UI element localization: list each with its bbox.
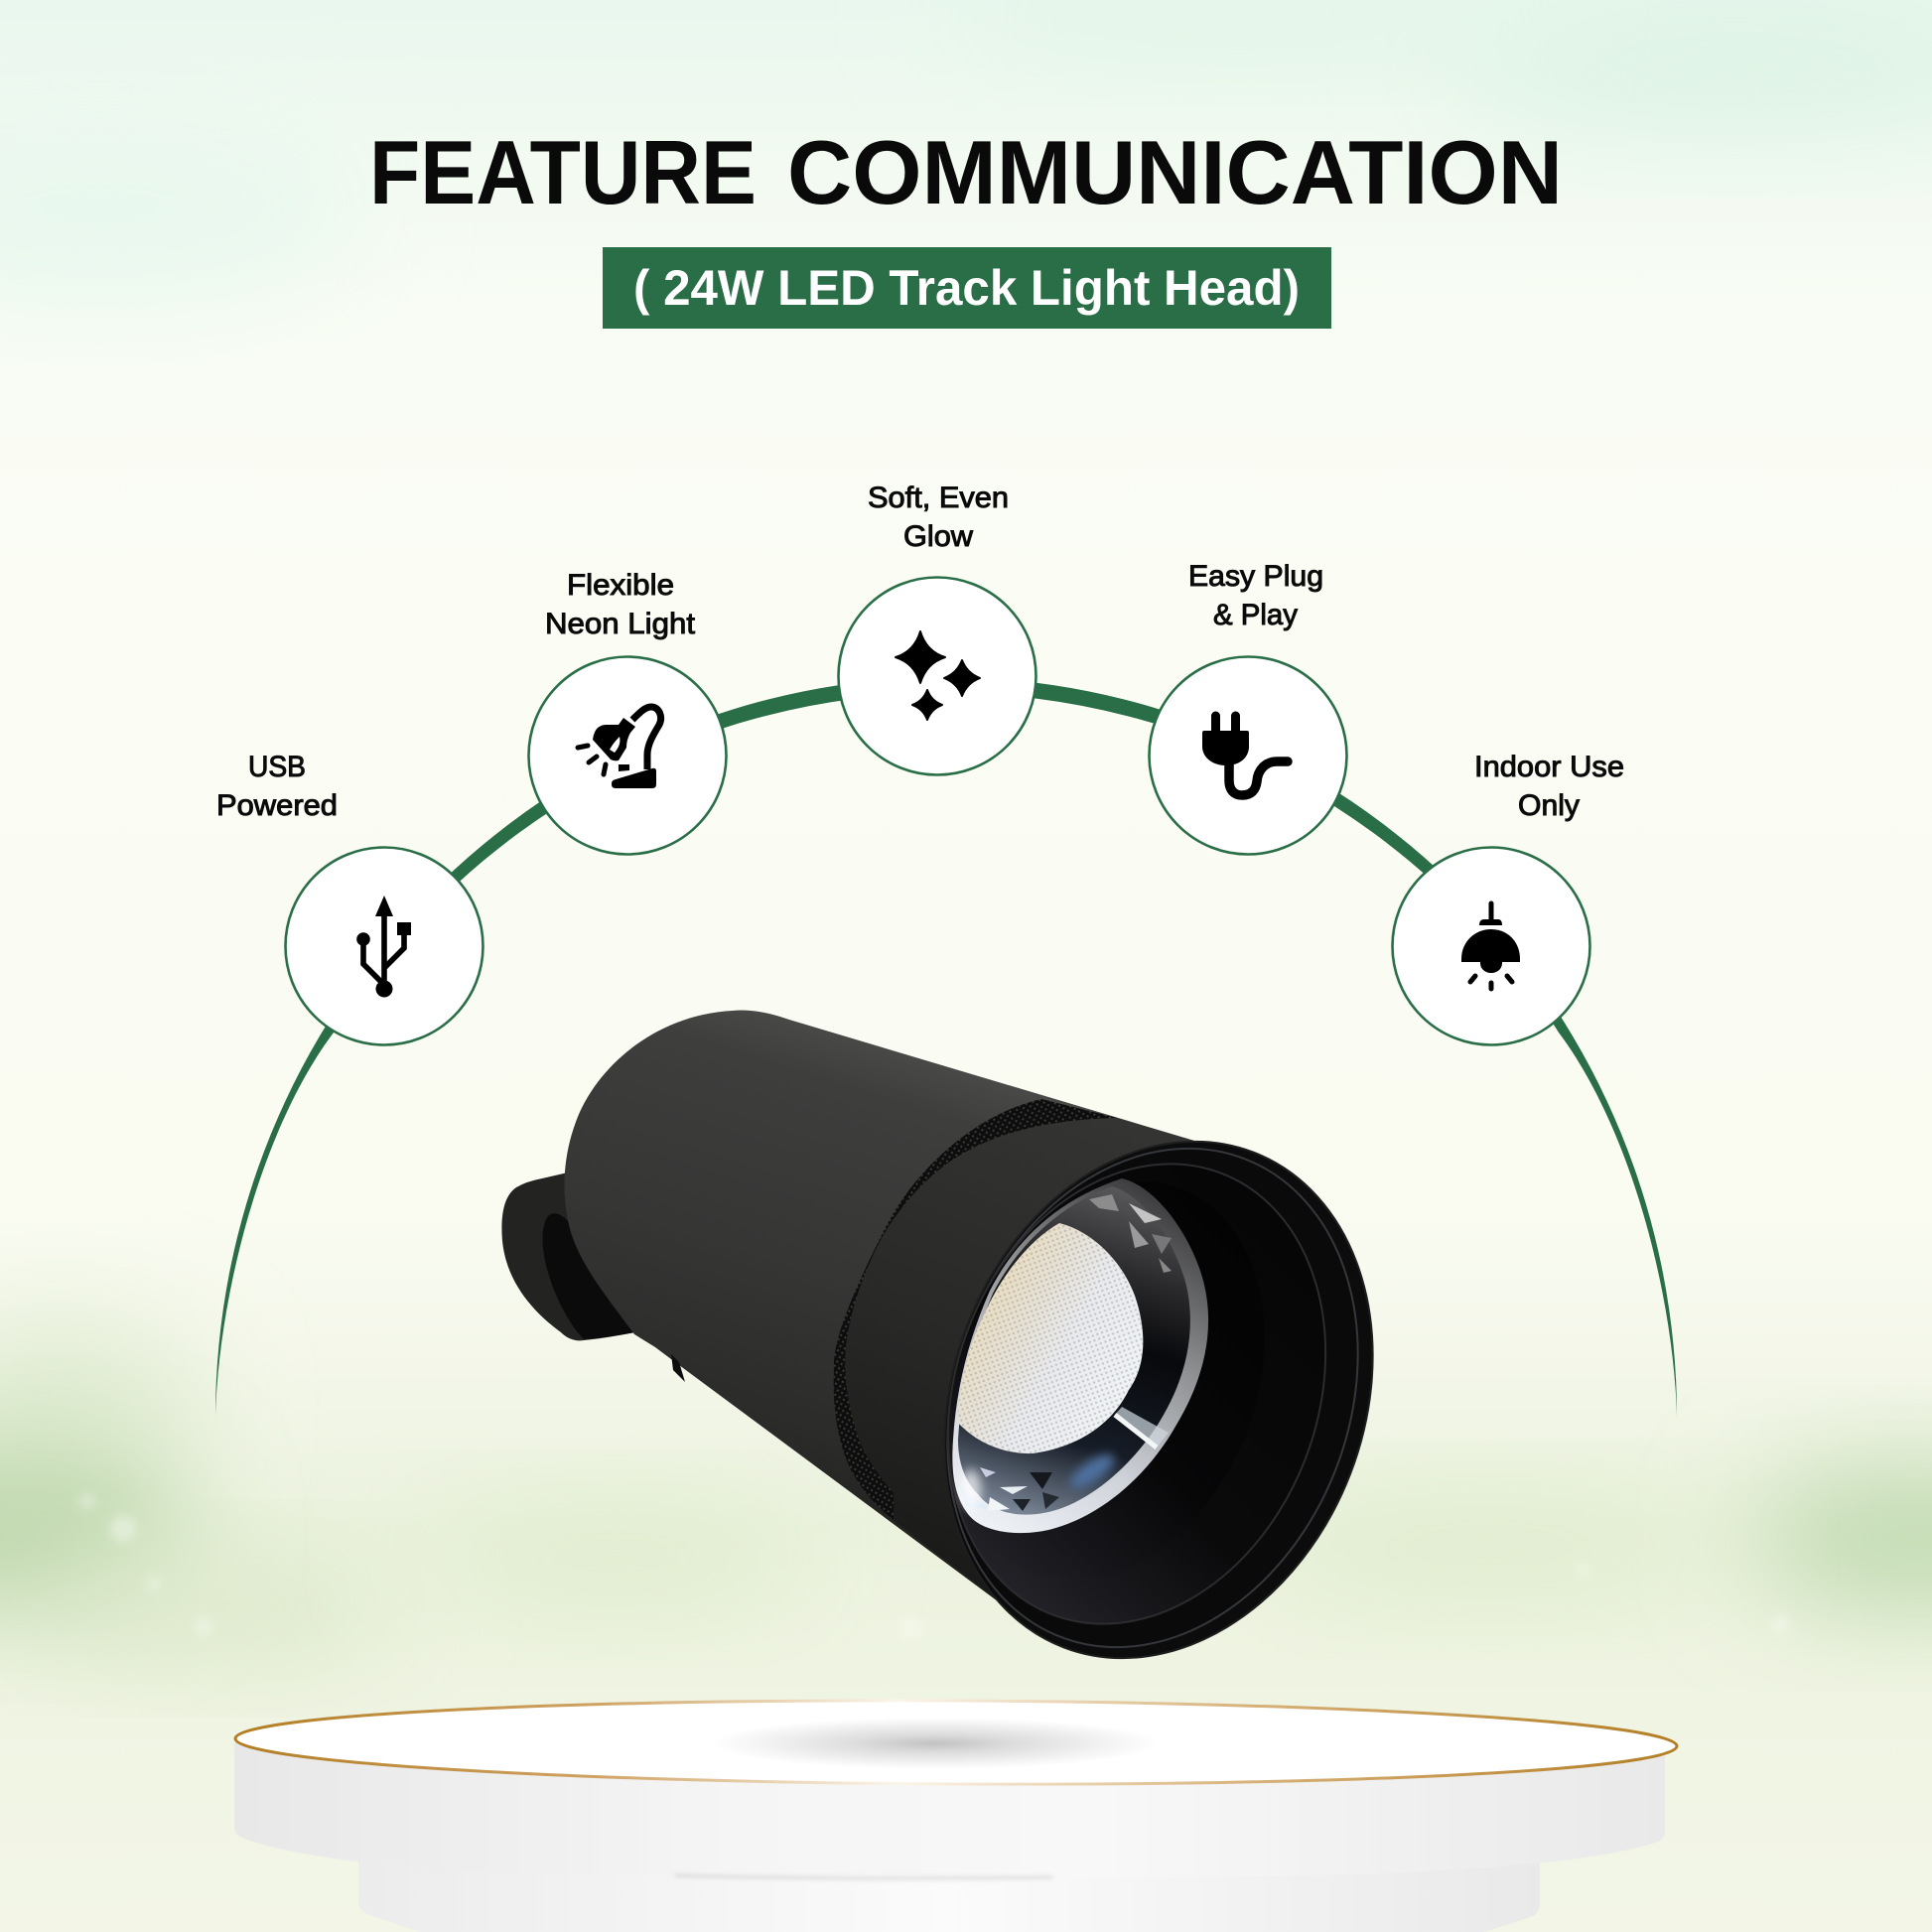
label: Indoor Use Only	[1474, 751, 1624, 822]
label: Soft, Even Glow	[868, 482, 1009, 553]
icon: sparkles	[896, 631, 980, 720]
label: Easy Plug & Play	[1188, 560, 1323, 631]
podium upper tier	[234, 1742, 1665, 1878]
label: Easy Plug & Play: Easy Plug	[1188, 560, 1323, 593]
product: track light head	[501, 1010, 1446, 1721]
front collar	[845, 1118, 1231, 1638]
icon: pendant lamp	[1461, 903, 1520, 989]
label: Indoor Use Only: Only	[1518, 789, 1580, 822]
podium top surface	[235, 1697, 1677, 1788]
label: Easy Plug & Play: & Play	[1213, 599, 1298, 631]
lens spoke	[1115, 1407, 1169, 1448]
podium shadow	[712, 1718, 1159, 1769]
feature: Soft, Even Glow	[838, 482, 1036, 774]
lens rim	[952, 1178, 1208, 1533]
mounting bracket	[501, 1170, 635, 1340]
label: Flexible Neon Light: Neon Light	[545, 608, 696, 640]
label: USB Powered: Powered	[216, 789, 338, 822]
lens	[952, 1178, 1208, 1533]
label: USB Powered: USB	[248, 751, 306, 783]
cylinder body	[564, 1010, 1231, 1638]
icon: plug	[1202, 716, 1288, 795]
front rim	[872, 1079, 1446, 1721]
bulb diffuser	[958, 1223, 1143, 1453]
title	[369, 123, 1563, 223]
podium	[234, 1697, 1677, 1932]
label: Flexible Neon Light	[545, 569, 696, 640]
icon: desk lamp	[578, 707, 661, 788]
subtitle banner	[603, 247, 1331, 329]
inner ring	[884, 1109, 1390, 1679]
feature: USB Powered	[216, 751, 483, 1044]
subtitle banner: ( 24W LED Track Light Head)	[633, 260, 1300, 316]
feature: Indoor Use Only	[1392, 751, 1624, 1044]
label: Soft, Even Glow: Soft, Even	[868, 482, 1009, 514]
label: Soft, Even Glow: Glow	[903, 520, 973, 553]
connecting arc	[215, 677, 1677, 1417]
knurled ring	[834, 1099, 1117, 1520]
title: COMMUNICATION	[787, 123, 1563, 223]
inner reflector	[897, 1136, 1319, 1626]
rim inner edge	[878, 1088, 1428, 1708]
label: Flexible Neon Light: Flexible	[567, 569, 674, 602]
label: Indoor Use Only: Indoor Use	[1474, 751, 1624, 783]
lens glass	[958, 1186, 1190, 1515]
label: USB Powered	[216, 751, 338, 822]
title: FEATURE	[369, 123, 757, 223]
feature: Easy Plug & Play	[1150, 560, 1346, 854]
podium lower tier	[358, 1847, 1540, 1932]
feature: Flexible Neon Light	[528, 569, 727, 854]
icon: USB	[356, 896, 411, 997]
prism facets	[960, 1194, 1172, 1511]
